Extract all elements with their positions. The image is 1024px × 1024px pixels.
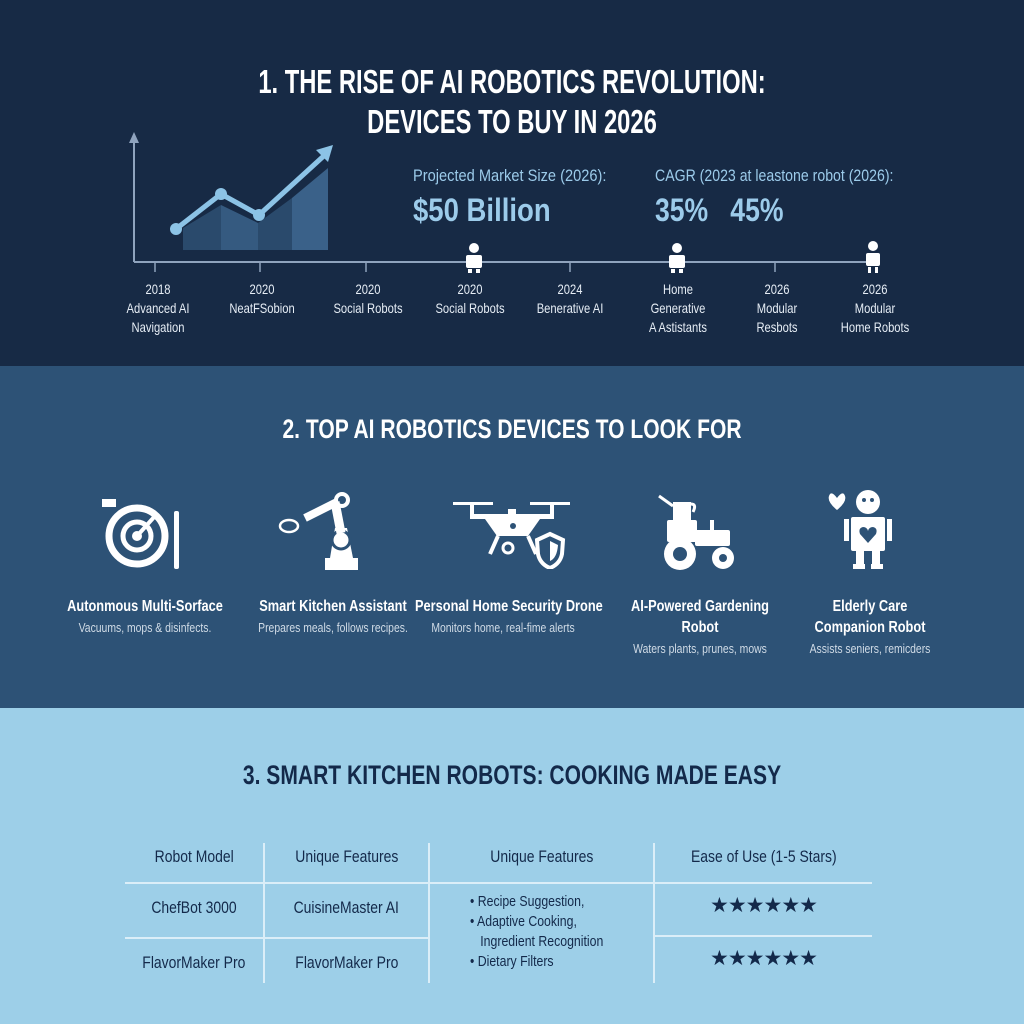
timeline labels: Resbots [756, 319, 798, 335]
stat: CAGR [655, 166, 893, 228]
section 1: market overview [0, 0, 1024, 366]
device: gardening robot: Waters plants, prunes, mows [633, 641, 767, 656]
icon: vacuum [102, 499, 179, 569]
device: kitchen assistant: Smart Kitchen Assistant [259, 598, 407, 615]
timeline labels: A Astistants [649, 319, 707, 335]
timeline labels: Social Robots [435, 300, 505, 316]
timeline labels: Generative [651, 300, 705, 316]
device: kitchen assistant: Prepares meals, follows recipes. [258, 620, 408, 635]
device: security drone: Monitors home, real-fime alerts [431, 620, 575, 635]
device: vacuum: Autonmous Multi-Sorface [67, 598, 223, 615]
table: CuisineMaster AI [294, 898, 399, 917]
title [258, 63, 766, 140]
stat: market size [413, 166, 606, 228]
stat: CAGR: 35% 45% [655, 192, 783, 228]
device: gardening robot: Robot [682, 619, 718, 636]
timeline labels [126, 281, 909, 335]
timeline labels: 2020 [458, 281, 482, 297]
timeline labels: 2026 [765, 281, 789, 297]
icon: kitchen arm [278, 492, 358, 570]
timeline labels: Modular [757, 300, 797, 316]
chart: growth line [129, 132, 333, 262]
device: gardening robot: AI-Powered Gardening [631, 598, 769, 615]
title: 1. THE RISE OF AI ROBOTICS REVOLUTION: [258, 63, 766, 100]
timeline labels: 2020 [250, 281, 274, 297]
table: FlavorMaker Pro [295, 953, 398, 972]
table: FlavorMaker Pro [142, 953, 246, 972]
device: vacuum [67, 598, 223, 635]
table: • Adaptive Cooking, [470, 913, 577, 930]
table: Unique Features [490, 847, 593, 866]
timeline labels: Benerative AI [537, 300, 603, 316]
table: ★★★★★★ [710, 894, 817, 917]
device: companion robot [810, 598, 930, 656]
table: ★★★★★★ [710, 947, 817, 970]
icon: drone with shield [453, 502, 570, 569]
heading: 2. TOP AI ROBOTICS DEVICES TO LOOK FOR [282, 414, 742, 444]
table: ChefBot 3000 [151, 898, 237, 917]
stat: market size: $50 Billion [413, 192, 551, 228]
device: companion robot: Companion Robot [815, 619, 925, 636]
title: DEVICES TO BUY IN 2026 [367, 103, 657, 140]
device: companion robot: Elderly Care [833, 598, 907, 615]
section 2: top devices [0, 366, 1024, 708]
timeline labels: 2026 [863, 281, 887, 297]
table: Unique Features [295, 847, 398, 866]
device: companion robot: Assists seniers, remicders [810, 641, 930, 656]
timeline labels: 2020 [356, 281, 380, 297]
table: Ease of Use (1-5 Stars) [691, 847, 836, 866]
stat: market size: Projected Market Size (2026): [413, 166, 606, 185]
table: Robot Model [154, 847, 234, 866]
timeline labels: Social Robots [333, 300, 403, 316]
timeline labels: NeatFSobion [229, 300, 295, 316]
stat: CAGR: CAGR (2023 at leastone robot (2026): [655, 166, 893, 185]
timeline axis with robot markers [134, 241, 880, 273]
timeline labels: Home [663, 281, 693, 297]
device: security drone: Personal Home Security Drone [415, 598, 603, 615]
icon: gardening tractor [658, 494, 734, 570]
device: security drone [415, 598, 603, 635]
icon: companion robot [828, 490, 892, 569]
device: gardening robot [631, 598, 769, 656]
table: Ingredient Recognition [480, 933, 603, 950]
device: kitchen assistant [258, 598, 408, 635]
timeline labels: 2024 [558, 281, 582, 297]
timeline labels: Modular [855, 300, 895, 316]
table: • Dietary Filters [470, 953, 554, 970]
table [125, 843, 872, 983]
heading: 3. SMART KITCHEN ROBOTS: COOKING MADE EASY [243, 760, 781, 790]
timeline labels: Navigation [132, 319, 184, 335]
device: vacuum: Vacuums, mops & disinfects. [79, 620, 211, 635]
timeline labels: Advanced AI [127, 300, 189, 316]
section 3: kitchen robots [0, 708, 1024, 1024]
timeline labels: Home Robots [841, 319, 909, 335]
table: • Recipe Suggestion, [470, 893, 584, 910]
timeline labels: 2018 [146, 281, 170, 297]
